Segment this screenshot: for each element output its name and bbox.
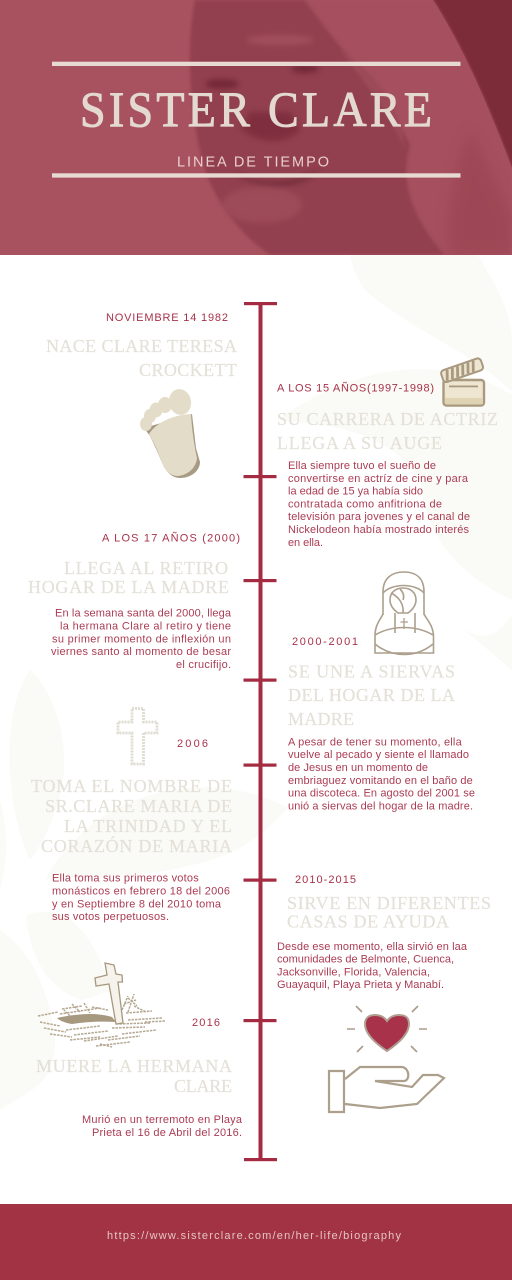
event: name: Ella toma sus primeros votos bbox=[52, 873, 199, 885]
portrait: face bbox=[190, 0, 445, 255]
event: retreat: viernes santo al momento de besar bbox=[51, 646, 231, 658]
event: joins siervas: embriaguez vomitando en el baño de bbox=[288, 775, 473, 787]
footer bbox=[0, 1204, 512, 1280]
event: name: 2006 bbox=[177, 738, 208, 750]
event: retreat: su primer momento de inflexión un bbox=[52, 633, 231, 645]
event: death: MUERE LA HERMANA bbox=[36, 1056, 232, 1076]
event: name: y en Septiembre 8 del 2010 toma bbox=[52, 898, 222, 910]
event: death: Prieta el 16 de Abril del 2016. bbox=[92, 1127, 242, 1139]
event: joins siervas: 2000-2001 bbox=[292, 636, 358, 648]
event: retreat: HOGAR DE LA MADRE bbox=[28, 577, 229, 597]
header rule bottom bbox=[52, 173, 460, 178]
event: retreat: LLEGA AL RETIRO bbox=[64, 558, 228, 578]
event: joins siervas: de Jesus en un momento de bbox=[288, 762, 428, 774]
event: acting career: LLEGA A SU AUGE bbox=[277, 433, 442, 453]
event: service: 2010-2015 bbox=[295, 874, 356, 886]
event: service: CASAS DE AYUDA bbox=[287, 912, 449, 932]
event: service: Guayaquil, Playa Prieta y Manabí. bbox=[277, 979, 444, 991]
event: joins siervas: vuelve al pecado y siente el llamado bbox=[288, 749, 469, 761]
event: death: 2016 bbox=[192, 1017, 220, 1029]
event: joins siervas: A pesar de tener su momento, ella bbox=[288, 736, 463, 748]
event: death bbox=[36, 1017, 243, 1139]
event: retreat bbox=[28, 532, 240, 671]
event: joins siervas bbox=[288, 636, 475, 812]
event: birth: CROCKETT bbox=[139, 360, 237, 380]
event: acting career: SU CARRERA DE ACTRIZ bbox=[277, 409, 498, 429]
event: acting career bbox=[277, 382, 498, 549]
event: acting career: en ella. bbox=[288, 537, 323, 549]
event: name: CORAZÓN DE MARIA bbox=[41, 835, 232, 856]
event: acting career: convertirse en actríz de cine y para bbox=[288, 473, 469, 485]
event: acting career: A LOS 15 AÑOS(1997-1998) bbox=[277, 382, 434, 395]
event: acting career: Nickelodeon había mostrado interés bbox=[288, 524, 470, 536]
event: retreat: En la semana santa del 2000, llega bbox=[55, 608, 232, 620]
event: name: sus votos perpetuosos. bbox=[52, 911, 169, 923]
background leaf shapes bbox=[0, 255, 512, 1110]
event: retreat: la hermana Clare al retiro y tiene bbox=[60, 620, 231, 632]
event: joins siervas: DEL HOGAR DE LA bbox=[288, 685, 455, 705]
icon: clapperboard bbox=[440, 357, 484, 406]
event: joins siervas: una discoteca. En agosto del 2001 se bbox=[288, 788, 475, 800]
event: joins siervas: MADRE bbox=[288, 709, 354, 729]
portrait: facial features bbox=[205, 35, 320, 223]
event: acting career: Ella siempre tuvo el sueño de bbox=[288, 460, 436, 472]
icon: grave with cross bbox=[38, 963, 166, 1047]
event: birth: NACE CLARE TERESA bbox=[46, 336, 237, 356]
event: name: LA TRINIDAD Y EL bbox=[64, 816, 232, 836]
footer: https://www.sisterclare.com/en/her-life/biography bbox=[107, 1230, 402, 1242]
event: name: TOMA EL NOMBRE DE bbox=[31, 776, 232, 796]
header rule top bbox=[52, 62, 460, 66]
icon: dotted cross bbox=[118, 708, 157, 764]
event: acting career: televisión para jovenes y el canal de bbox=[288, 511, 470, 523]
event: acting career: contratada como anfitriona de bbox=[288, 498, 442, 510]
event: service bbox=[277, 874, 491, 991]
event: birth bbox=[46, 312, 237, 380]
event: service: Jacksonville, Florida, Valencia, bbox=[277, 966, 430, 978]
timeline bbox=[244, 302, 277, 1161]
event: retreat: A LOS 17 AÑOS (2000) bbox=[102, 532, 240, 545]
event: joins siervas: SE UNE A SIERVAS bbox=[288, 662, 455, 682]
subtitle: LINEA DE TIEMPO bbox=[177, 154, 329, 170]
event: birth: NOVIEMBRE 14 1982 bbox=[106, 312, 228, 324]
portrait: dark backdrop bbox=[433, 0, 512, 168]
event: name: monásticos en febrero 18 del 2006 bbox=[52, 886, 230, 898]
event: joins siervas: unió a siervas del hogar de la madre. bbox=[288, 800, 473, 812]
icon: baby foot bbox=[140, 387, 200, 478]
event: name bbox=[31, 738, 232, 923]
event: acting career: la edad de 15 ya había sido bbox=[288, 486, 423, 498]
icon: nun bbox=[375, 572, 434, 654]
portrait: veil bbox=[433, 0, 512, 168]
event: death: CLARE bbox=[174, 1076, 232, 1096]
event: service: Desde ese momento, ella sirvió en laa bbox=[277, 941, 468, 953]
event: service: comunidades de Belmonte, Cuenca, bbox=[277, 954, 454, 966]
header panel bbox=[0, 0, 512, 255]
title: SISTER CLARE bbox=[80, 82, 432, 137]
event: death: Murió en un terremoto en Playa bbox=[82, 1114, 243, 1126]
icon: heart in hand bbox=[329, 1006, 444, 1112]
event: service: SIRVE EN DIFERENTES bbox=[287, 893, 491, 913]
event: retreat: el crucifijo. bbox=[176, 659, 231, 671]
event: name: SR.CLARE MARIA DE bbox=[45, 796, 232, 816]
